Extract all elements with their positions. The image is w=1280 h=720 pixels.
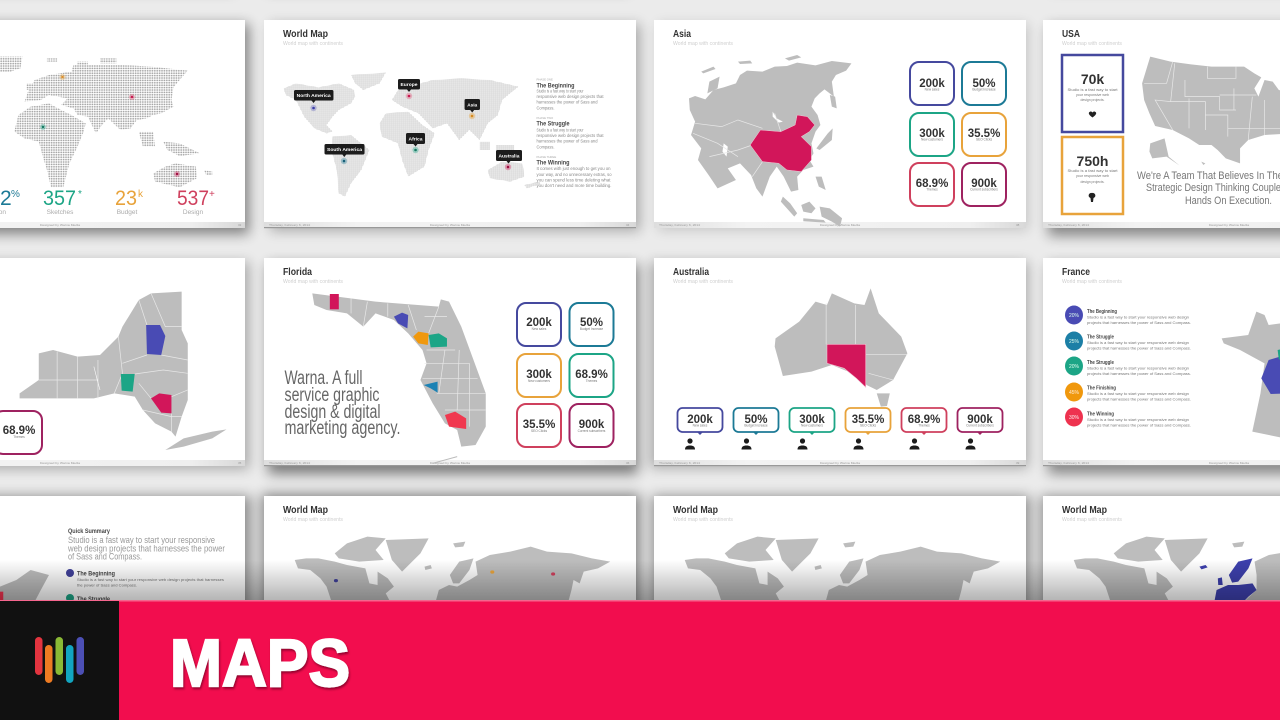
summary heading and text: Quick Summary (68, 529, 111, 535)
panel: world map with continents: Designed by Warna Media (430, 223, 470, 227)
item: The Beginning (1065, 306, 1191, 325)
stat: 35.5% (962, 113, 1006, 156)
heading (283, 266, 344, 285)
text block: phases: harnesses the power of Sass and (536, 138, 598, 144)
summary heading and text: web design projects that harnesses the power (67, 544, 225, 554)
stat card: 750h: 750h (1077, 153, 1108, 169)
text block: phases: PHASE THREE (536, 155, 556, 159)
item: The Struggle 25% (1065, 332, 1191, 350)
heading: World map with continents (673, 517, 734, 523)
stat: 200k (517, 303, 561, 346)
map pins (40, 74, 180, 177)
heading (283, 28, 344, 47)
panel: Florida (264, 258, 636, 466)
item: The Struggle 20%: 20% (1069, 364, 1080, 370)
item: The Struggle 20%: projects that harnesses the power of Sass and Compass. (1087, 372, 1191, 376)
map fragment (0, 570, 49, 602)
statistics row: k (138, 189, 144, 200)
stat: 35.5% (517, 404, 561, 447)
panel: New York state (0, 258, 245, 466)
tagline: marketing agency. (284, 418, 400, 439)
callout: 68.9%: Themes (918, 424, 930, 428)
panel: world map plain (654, 496, 1026, 626)
map: Florida counties (312, 293, 486, 463)
tagline (284, 368, 400, 439)
text block: phases: PHASE TWO (536, 116, 554, 120)
stat card: 70k: Studio is a fast way to start (1068, 88, 1118, 92)
heading (1062, 504, 1123, 523)
heading: World map with continents (673, 41, 734, 47)
callout: 50%: 50% (744, 414, 768, 426)
item: The Struggle (66, 594, 110, 603)
heading: USA (1062, 28, 1080, 40)
pin: South America (324, 144, 364, 164)
banner (0, 600, 1280, 720)
callout: 35.5%: SEO Clicks (860, 424, 876, 428)
icon: heart (1089, 112, 1096, 118)
panel: dotted world map slide: Designed by Warna Media (40, 223, 80, 227)
statistics row: Design (183, 209, 204, 216)
pin: North America: North America (297, 93, 331, 99)
callout: 300k: New customers (801, 424, 823, 428)
item: The Finishing: projects that harnesses the power of Sass and Compass. (1087, 398, 1191, 402)
callout: 900k: 900k (967, 414, 993, 426)
callout: 900k (958, 408, 1002, 435)
item: The Finishing: 45% (1069, 390, 1080, 396)
item: The Beginning: 20% (1069, 313, 1080, 319)
stat: 200k: New sales (532, 327, 547, 331)
pin: Australia: Australia (498, 154, 520, 160)
statistics row: 23 (115, 187, 137, 210)
heading: France (1062, 266, 1090, 278)
summary heading and text: Studio is a fast way to start your responsive (68, 535, 215, 546)
dotted world map (284, 73, 541, 197)
item: The Struggle 20% (1065, 356, 1191, 376)
heading: World map with continents (1062, 279, 1123, 285)
stat: 68.9%: Themes (926, 188, 938, 192)
callout: 300k: 300k (799, 414, 825, 426)
item: The Beginning: Studio is a fast way to start your responsive web design (1087, 316, 1189, 320)
callout: 35.5%: 35.5% (852, 414, 884, 426)
pin: Africa (406, 133, 425, 153)
text block: phases: Studio is a fast way to start your (536, 128, 584, 132)
logo block (0, 601, 119, 720)
map: world (295, 537, 610, 605)
map: Asia with China highlighted (689, 55, 851, 227)
pin: Europe (398, 79, 420, 99)
item: The Finishing: Studio is a fast way to start your responsive web design (1087, 392, 1189, 396)
stat: 50%: 50% (972, 78, 996, 90)
stat: 35.5%: SEO Clicks (531, 429, 547, 433)
map: world (685, 537, 1000, 605)
heading: Florida (283, 266, 312, 278)
heading: World map with continents (283, 41, 344, 47)
panel: Florida: Designed by Warna Media (430, 461, 470, 465)
statistics row: % (11, 189, 20, 200)
statistics row: Sketches (47, 209, 74, 216)
panel: world map Europe highlighted (1043, 496, 1280, 626)
heading: World map with continents (283, 517, 344, 523)
item: The Beginning: The Beginning (77, 570, 115, 578)
statistics row: 357 (43, 187, 76, 210)
stat card: 70k (1062, 55, 1123, 132)
panel: Asia (654, 20, 1026, 228)
icon: colored bars (35, 637, 84, 683)
stat card: 70k: design projects. (1080, 98, 1105, 102)
panel: France: Designed by Warna Media (1209, 461, 1249, 465)
item: The Winning: Studio is a fast way to start your responsive web design (1087, 418, 1189, 422)
item: The Struggle 25%: Studio is a fast way to start your responsive web design (1087, 341, 1189, 345)
callout: 900k: Current subscribers (966, 424, 994, 428)
stat: 68.9% (0, 411, 42, 454)
panel: dotted world map slide: 32 (238, 223, 242, 227)
panel: New York state: 35 (238, 461, 242, 465)
panel: Australia (654, 258, 1026, 466)
panel: Australia: Thursday, February 6, 2014 (659, 461, 700, 465)
stat: 300k: 300k (526, 369, 552, 381)
text block: phases: you don't need and more time building. (536, 183, 612, 188)
statistics row: + (209, 189, 215, 200)
title: MAPS (170, 626, 350, 701)
text block: phases: Studio is a fast way to start your (536, 88, 584, 94)
panel: world map with continents: 34 (626, 223, 630, 227)
item: The Finishing: The Finishing (1087, 386, 1116, 392)
icon: light bulb (1089, 193, 1095, 202)
stat card: 750h: your responsive web (1076, 174, 1109, 178)
stat: 50%: 50% (580, 317, 603, 329)
stat: 35.5%: SEO Clicks (976, 138, 992, 142)
stat card: 750h: Studio is a fast way to start (1068, 169, 1118, 173)
text block: phases: PHASE ONE (536, 78, 553, 82)
map: France (1222, 312, 1280, 440)
item: The Beginning: Studio is a fast way to start your responsive web design projects that harnesses (77, 578, 225, 582)
panel: world map with continents (264, 20, 636, 228)
stat: 68.9% (570, 354, 614, 397)
heading: World map with continents (283, 279, 344, 285)
map: Australia (775, 288, 907, 407)
pin: Europe: Europe (400, 82, 418, 88)
heading (1062, 28, 1123, 47)
stat: 50% (962, 62, 1006, 105)
callout: 200k (678, 408, 722, 435)
text block: phases: The Beginning (536, 82, 575, 90)
stat: 200k: 200k (526, 317, 552, 329)
text block: phases: responsive web design projects that (536, 94, 604, 99)
text block: phases: Compass. (536, 106, 554, 110)
text block: phases: The Struggle (536, 120, 570, 128)
pin: North America (294, 90, 334, 111)
item: The Beginning: the power of Sass and Compass. (77, 584, 137, 588)
callout: 68.9% (902, 408, 946, 435)
item: The Struggle: The Struggle (77, 596, 110, 603)
stat: 300k: New customers (528, 379, 550, 383)
pin: Asia: Asia (467, 102, 478, 108)
text block: phases: Compass. (536, 144, 554, 150)
stat: 68.9%: Themes (586, 379, 598, 383)
heading (283, 504, 344, 523)
stat: 50%: Budget Increase (580, 327, 603, 331)
callout: 200k: New sales (693, 424, 708, 428)
callout: 35.5% (846, 408, 890, 435)
item: The Winning: 30% (1069, 415, 1080, 421)
tagline: design & digital (284, 402, 380, 423)
item: The Struggle 25%: 25% (1069, 339, 1080, 345)
tagline: service graphic (284, 385, 380, 406)
heading: World map with continents (1062, 41, 1123, 47)
tagline (1137, 170, 1280, 207)
item: The Finishing (1065, 382, 1191, 402)
heading: World Map (673, 504, 718, 516)
panel: Australia: Designed by Warna Media (820, 461, 860, 465)
summary heading and text (67, 529, 225, 562)
pin: Africa: Africa (408, 136, 423, 142)
heading: World Map (1062, 504, 1107, 516)
heading (673, 28, 734, 47)
statistics row: 537 (177, 187, 209, 210)
heading: World Map (283, 504, 328, 516)
stat: 35.5%: 35.5% (523, 419, 555, 431)
bottom fade (0, 560, 1280, 601)
statistics row: * (78, 189, 82, 200)
stat: 300k: 300k (919, 128, 945, 140)
item: The Beginning (66, 569, 225, 588)
statistics row: Budget (117, 209, 137, 216)
item: The Beginning: The Beginning (1087, 309, 1117, 315)
pin: Asia (464, 99, 480, 119)
heading (673, 266, 734, 285)
stat: 900k (570, 404, 614, 447)
stat: 68.9%: 68.9% (916, 178, 948, 190)
panel: Florida: 36 (626, 461, 630, 465)
text block: phases (536, 78, 612, 188)
stat: 900k: 900k (971, 178, 997, 190)
stat card: 750h (1062, 137, 1123, 214)
panel: Florida: Thursday, February 6, 2014 (269, 461, 310, 465)
heading: Australia (673, 266, 709, 278)
heading: World Map (283, 28, 328, 40)
panel: New York state: Designed by Warna Media (40, 461, 80, 465)
tagline: Warna. A full (284, 368, 362, 389)
item: The Winning (1065, 408, 1191, 428)
panel: world map, North America, Asia pins (264, 496, 636, 626)
stat: 900k: Current subscribers (578, 429, 606, 433)
item: The Winning: projects that harnesses the power of Sass and Compass. (1087, 424, 1191, 428)
text block: phases: harnesses the power of Sass and (536, 100, 598, 104)
stat: 300k (517, 354, 561, 397)
stat: 50% (570, 303, 614, 346)
stat: 35.5%: 35.5% (968, 128, 1000, 140)
panel: world map with continents: Thursday, February 6, 2014 (269, 223, 310, 227)
statistics row: 2 (0, 187, 12, 210)
panel: Asia: Designed by Warna Media (820, 223, 860, 227)
text block: phases: It comes with just enough to get you on (536, 166, 611, 171)
heading (673, 504, 734, 523)
panel: dotted world map slide (0, 20, 245, 228)
stat: 68.9%: 68.9% (3, 425, 35, 437)
dotted map (0, 57, 212, 187)
stat: 900k: Current subscribers (970, 188, 998, 192)
callout: 300k (790, 408, 834, 435)
item: The Struggle 25%: The Struggle (1087, 334, 1114, 340)
stat: 50%: Budget Increase (972, 88, 996, 92)
stat card: 70k: 70k (1081, 71, 1104, 87)
stat: 300k: New customers (921, 138, 943, 142)
panel: Asia: 38 (1016, 223, 1020, 227)
stat: 900k (962, 163, 1006, 206)
item: The Struggle 25%: projects that harnesses the power of Sass and Compass. (1087, 346, 1191, 350)
heading (1062, 266, 1123, 285)
callout: 200k: 200k (687, 414, 713, 426)
panel: Australia: 39 (1016, 461, 1020, 465)
map: New York (20, 292, 227, 450)
stat card: 70k: your responsive web (1076, 93, 1109, 97)
summary heading and text: of Sass and Compass. (68, 552, 142, 562)
item: The Struggle 20%: Studio is a fast way to start your responsive web design (1087, 366, 1189, 370)
text block: phases: responsive web design projects that (536, 133, 604, 138)
heading: World map with continents (673, 279, 734, 285)
panel: USA: Thursday, February 6, 2014 (1048, 223, 1089, 227)
map: USA (1142, 57, 1280, 166)
map: world with Europe (1074, 537, 1280, 605)
stat: 200k: 200k (919, 78, 945, 90)
panel: USA: Designed by Warna Media (1209, 223, 1249, 227)
stat: 68.9%: Themes (13, 435, 25, 439)
panel: USA (1043, 20, 1280, 228)
stat: 68.9% (910, 163, 954, 206)
item: The Winning: The Winning (1087, 412, 1114, 418)
panel: Asia: Thursday, February 6, 2014 (659, 223, 700, 227)
stat: 68.9%: 68.9% (575, 369, 608, 381)
item: The Beginning: projects that harnesses the power of Sass and Compass. (1087, 321, 1191, 325)
stat: 200k (910, 62, 954, 105)
callout: 50% (734, 408, 778, 435)
icons: people (685, 438, 976, 450)
callout: 50%: Budget Increase (744, 424, 768, 428)
statistics row (0, 187, 215, 216)
callout: 68.9%: 68.9% (908, 414, 940, 426)
text block: phases: The Winning (536, 160, 570, 166)
text block: phases: you can spend less time deleting what (536, 178, 611, 182)
stat: 300k (910, 113, 954, 156)
panel: France (1043, 258, 1280, 466)
pin: South America: South America (327, 147, 362, 153)
panel: quick summary (0, 496, 245, 626)
stat card: 750h: design projects. (1080, 180, 1105, 184)
stat: 900k: 900k (579, 419, 605, 431)
text block: phases: your way, and no unnecessary extras, so (536, 172, 612, 177)
heading: Asia (673, 28, 691, 40)
panel: France: Thursday, February 6, 2014 (1048, 461, 1089, 465)
stat: 200k: New sales (925, 88, 940, 92)
pin: Australia (496, 150, 522, 170)
item: The Struggle 20%: The Struggle (1087, 360, 1114, 366)
heading: World map with continents (1062, 517, 1123, 523)
